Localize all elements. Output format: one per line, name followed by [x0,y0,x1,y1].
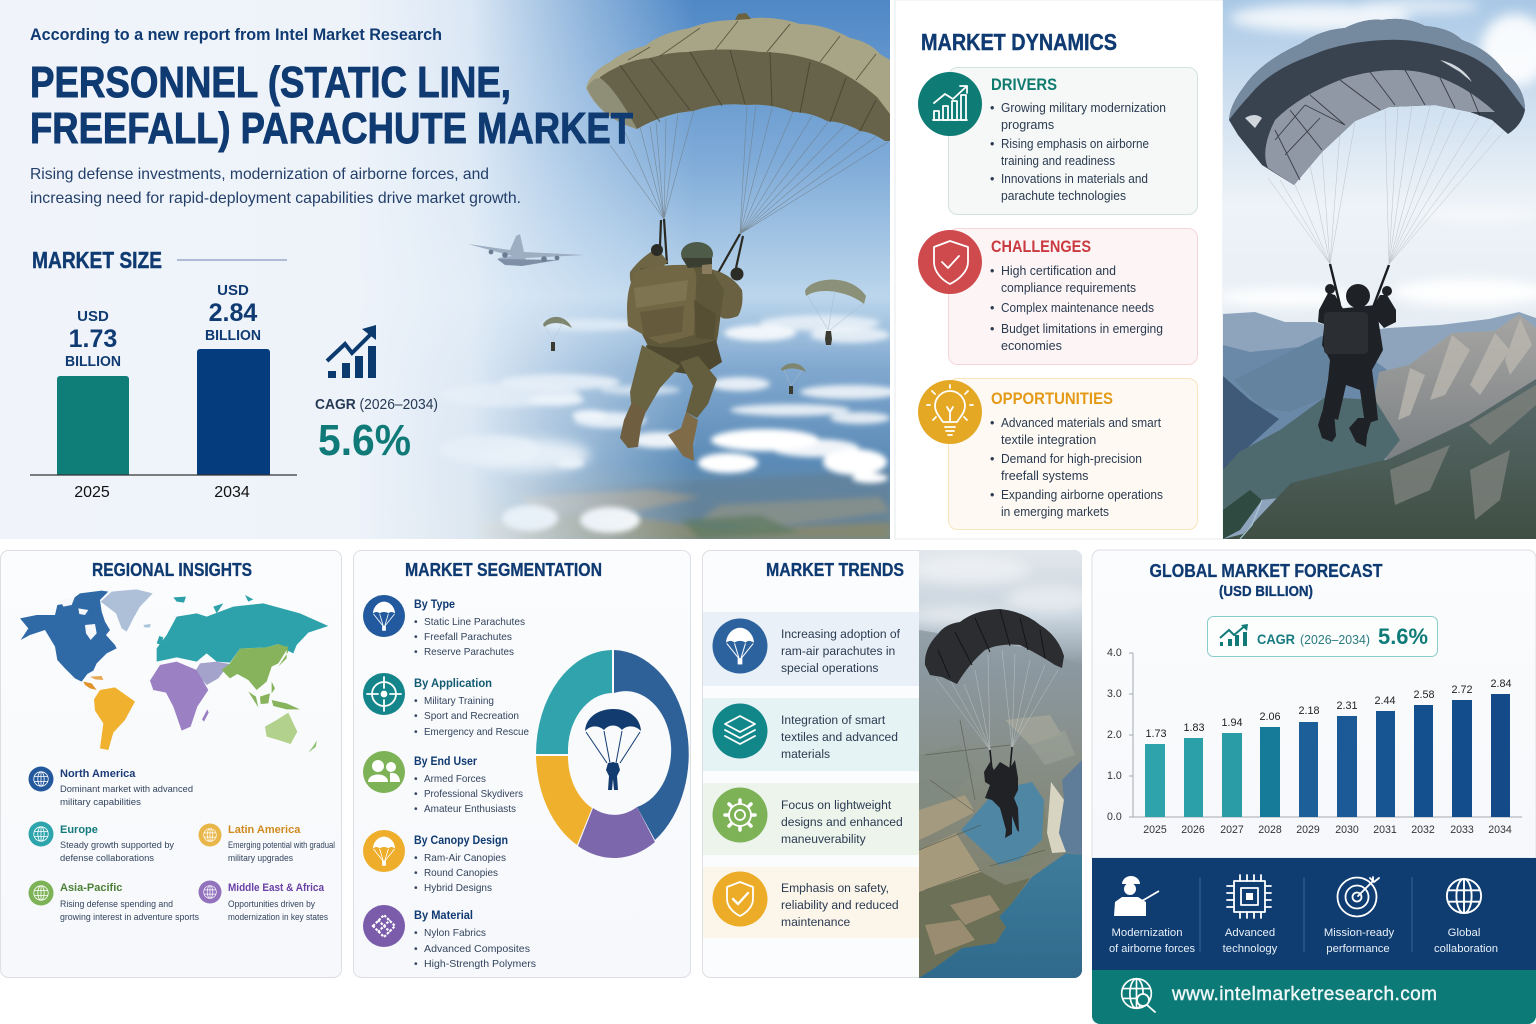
factor: collaboration: Global [1448,927,1480,939]
segment: by material: By Material [414,908,473,922]
bar chart: forecast: 2025 [1143,824,1167,836]
bar chart: forecast: 2026 [1181,824,1205,836]
legend: Middle East and Africa: modernization in key states [228,912,328,923]
segment: by application: • [414,696,418,707]
legend: North America: North America [60,768,136,780]
segment: by end user [363,751,523,815]
card: drivers: training and readiness [1001,154,1115,168]
card: opportunities: freefall systems [1001,469,1088,483]
card: opportunities: Advanced materials and smart [1001,416,1161,430]
world map [20,589,328,753]
title: FREEFALL) PARACHUTE MARKET [30,104,633,153]
trend: smart textiles [703,698,919,771]
image: coastal freefall [919,550,1082,978]
segment: by material: • [414,944,418,955]
bar chart: market size: BILLION [65,354,121,370]
legend: North America: Dominant market with advanced [60,784,193,795]
subtitle [30,166,521,207]
card: challenges [918,228,1198,364]
bar chart: forecast: 2.72 [1451,684,1473,696]
segment: by material: Advanced Composites [424,944,530,955]
trend: safety: Emphasis on safety, [781,881,889,895]
heading: market size: MARKET SIZE [32,247,162,273]
legend: North America: military capabilities [60,797,141,808]
legend: Middle East and Africa: Opportunities driven by [228,899,315,910]
factor: mission ready: Mission-ready [1324,927,1395,939]
heading: market segmentation: MARKET SEGMENTATION [405,560,602,580]
heading: global market forecast [1150,560,1383,600]
soldier body [620,242,744,461]
segment: by canopy design [363,830,508,894]
canopy [1229,19,1525,185]
factor: collaboration: collaboration [1434,943,1498,955]
illustration: main parachute and soldier [586,13,890,461]
card: drivers: Rising emphasis on airborne [1001,137,1149,151]
card: opportunities: • [990,488,994,502]
bar chart: forecast: 2.31 [1336,700,1358,712]
segment: by type: • [414,617,418,628]
bar chart: forecast: 3.0 [1107,688,1122,700]
card: challenges: • [990,322,994,336]
panel: global market forecast [1092,550,1536,858]
panel: hero [0,0,900,539]
bar chart: forecast: 2.18 [1298,705,1320,717]
bar chart: forecast: 2032 [1411,824,1435,836]
card: challenges: • [990,264,994,278]
trend: safety: reliability and reduced [781,898,899,912]
risers [660,219,743,280]
skydiver [984,747,1019,838]
bar chart: forecast: 4.0 [1107,647,1122,659]
segment: by end user: Professional Skydivers [424,789,523,800]
factor: technology: Advanced [1225,927,1275,939]
segment: by canopy design: Ram-Air Canopies [424,853,506,864]
segment: by application: Emergency and Rescue [424,727,529,738]
subtitle: Rising defense investments, modernization of airborne forces, and [30,166,489,183]
factor: technology [1223,875,1278,955]
trend: lightweight: Focus on lightweight [781,798,892,812]
card: challenges: • [990,301,994,315]
heading: regional insights: REGIONAL INSIGHTS [92,560,252,580]
legend: Asia-Pacific: growing interest in adventure sports [60,912,199,923]
legend: Europe: Steady growth supported by [60,840,174,851]
factor: modernization: Modernization [1112,927,1182,939]
segment: by type: • [414,632,418,643]
bar chart: forecast: 0.0 [1107,811,1122,823]
donut chart [536,650,689,858]
segment: by application [363,673,529,738]
segment: by end user: Armed Forces [424,774,486,785]
legend: Europe [28,822,174,864]
card: drivers: Innovations in materials and [1001,172,1148,186]
bar chart: forecast: 2031 [1373,824,1397,836]
card: drivers: • [990,172,994,186]
card: opportunities [918,378,1198,530]
segment: by type: By Type [414,597,455,611]
bar chart: market size [30,282,297,501]
CAGR stat: 5.6% [318,416,411,465]
trend: lightweight [703,783,919,855]
bar chart: forecast [1107,647,1522,836]
card: challenges: economies [1001,339,1062,353]
segment: by canopy design: Round Canopies [424,868,498,879]
segment: by end user: Amateur Enthusiasts [424,804,516,815]
canopy [925,609,1064,684]
card: opportunities: Demand for high-precision [1001,452,1142,466]
bar chart: forecast: 2.58 [1413,689,1435,701]
trend: ram-air: special operations [781,661,878,675]
legend: Asia-Pacific [28,880,199,923]
segment: by end user: • [414,789,418,800]
segment: by material: • [414,959,418,970]
illustration: distant parachutists [543,280,866,394]
segment: by end user: By End User [414,754,477,768]
factor: technology: technology [1223,943,1278,955]
card: drivers: • [990,137,994,151]
bar chart: forecast: 2.0 [1107,729,1122,741]
bar chart: forecast: 2.06 [1259,711,1281,723]
heading: global market forecast: GLOBAL MARKET FORECAST [1150,560,1383,581]
segment: by canopy design: • [414,883,418,894]
card: opportunities: • [990,452,994,466]
segment: by type [363,595,525,658]
legend: Middle East and Africa: Middle East & Africa [228,882,325,894]
segment: by canopy design: By Canopy Design [414,833,508,847]
bar chart: market size: 1.73 [69,325,117,353]
trend: smart textiles: textiles and advanced [781,730,898,744]
bar chart: forecast: 1.83 [1183,722,1205,734]
heading: market dynamics: MARKET DYNAMICS [921,29,1117,55]
segment: by material: • [414,928,418,939]
segment: by material [363,905,536,970]
legend: Europe: defense collaborations [60,853,154,864]
segment: by type: • [414,647,418,658]
legend: Asia-Pacific: Asia-Pacific [60,882,122,894]
bar chart: forecast: 1.94 [1221,717,1243,729]
bar chart: forecast: 1.0 [1107,770,1122,782]
callout: CAGR [1208,616,1438,656]
bar chart: market size: 2025 [74,484,110,501]
bar chart: forecast: 1.73 [1145,728,1167,740]
bar chart: market size: BILLION [205,328,261,344]
bar chart: forecast: 2028 [1258,824,1282,836]
footer: website [1092,970,1536,1024]
legend: Asia-Pacific: Rising defense spending and [60,899,173,910]
illustration: aircraft [468,234,585,266]
CAGR stat [315,397,438,465]
bar chart: forecast: 2027 [1220,824,1244,836]
bar chart: forecast: 2033 [1450,824,1474,836]
bar chart: forecast: 2.84 [1490,678,1512,690]
canopy [586,13,890,141]
trend: safety [703,867,919,938]
trend: ram-air: Increasing adoption of [781,627,901,641]
card: challenges: High certification and [1001,264,1116,278]
heading: market trends: MARKET TRENDS [766,560,904,580]
trend: safety: maintenance [781,915,851,929]
card: challenges: Complex maintenance needs [1001,301,1154,315]
trend: lightweight: maneuverability [781,832,867,846]
panel: regional insights [0,550,342,978]
callout: CAGR: CAGR [1257,631,1295,647]
CAGR stat: CAGR (2026–2034) [315,397,438,413]
bar chart: market size: 2.84 [209,299,257,327]
factor: mission ready [1324,877,1395,955]
banner: key factors [1092,858,1536,970]
card: opportunities: OPPORTUNITIES [991,390,1113,408]
card: opportunities: Expanding airborne operations [1001,488,1163,502]
land and coast [919,715,1082,978]
callout: CAGR: (2026–2034) [1300,633,1370,647]
bar chart: forecast: 2029 [1296,824,1320,836]
segment: by canopy design: • [414,868,418,879]
legend: Europe: Europe [60,824,98,836]
legend: Middle East and Africa [198,880,328,923]
segment: by canopy design: • [414,853,418,864]
card: challenges: CHALLENGES [991,238,1091,256]
legend: North America [28,766,193,808]
bar chart: forecast: 2034 [1488,824,1512,836]
card: opportunities: textile integration [1001,433,1096,447]
card: drivers: programs [1001,118,1054,132]
heading: global market forecast: (USD BILLION) [1219,584,1313,600]
segment: by type: Static Line Parachutes [424,617,525,628]
bar chart: forecast: 2030 [1335,824,1359,836]
image panel: mountain freefall [1210,0,1536,539]
panel: market segmentation [354,550,690,978]
card: challenges: Budget limitations in emerging [1001,322,1163,336]
icon: growth chart [327,325,376,378]
segment: by application: • [414,727,418,738]
trend: lightweight: designs and enhanced [781,815,903,829]
segment: by type: Freefall Parachutes [424,632,512,643]
factor: mission ready: performance [1326,943,1390,955]
bar chart: market size: USD [217,282,249,299]
intro line: According to a new report from Intel Market Research [30,26,442,44]
segment: by application: Military Training [424,696,494,707]
risers and skydiver [1330,264,1389,310]
trend: ram-air [703,612,919,686]
card: opportunities: • [990,416,994,430]
bar chart: market size: USD [77,308,109,325]
segment: by end user: • [414,774,418,785]
bar chart: market size: 2034 [214,484,250,501]
segment: by canopy design: Hybrid Designs [424,883,492,894]
bar chart: forecast: 2.44 [1374,695,1396,707]
card: drivers [918,68,1198,214]
card: opportunities: in emerging markets [1001,505,1109,519]
card: drivers: Growing military modernization [1001,101,1166,115]
segment: by application: Sport and Recreation [424,711,519,722]
segment: by application: By Application [414,676,492,690]
segment: by material: High-Strength Polymers [424,959,536,970]
panel: market trends [702,550,1095,978]
icon: parachutist [585,709,641,790]
factor: modernization: of airborne forces [1109,943,1195,955]
card: challenges: compliance requirements [1001,281,1136,295]
subtitle: increasing need for rapid-deployment capabilities drive market growth. [30,190,521,207]
footer: website: www.intelmarketresearch.com [1171,984,1437,1005]
legend: Latin America: Latin America [228,824,301,836]
segment: by application: • [414,711,418,722]
factor: collaboration [1434,879,1498,955]
panel: market dynamics [895,0,1223,539]
trend: ram-air: ram-air parachutes in [781,644,895,658]
segment: by material: Nylon Fabrics [424,928,486,939]
title [30,58,633,153]
callout: CAGR: 5.6% [1378,624,1428,649]
trend: smart textiles: Integration of smart [781,713,886,727]
card: drivers: parachute technologies [1001,189,1126,203]
mountains [1223,312,1536,539]
title: PERSONNEL (STATIC LINE, [30,58,511,107]
trend: smart textiles: materials [781,747,830,761]
segment: by type: Reserve Parachutes [424,647,514,658]
legend: Latin America: military upgrades [228,853,293,864]
factor: modernization [1109,876,1195,955]
card: drivers: • [990,101,994,115]
card: drivers: DRIVERS [991,76,1057,94]
legend: Latin America: Emerging potential with gradual [228,840,335,851]
legend: Latin America [198,824,335,864]
segment: by end user: • [414,804,418,815]
